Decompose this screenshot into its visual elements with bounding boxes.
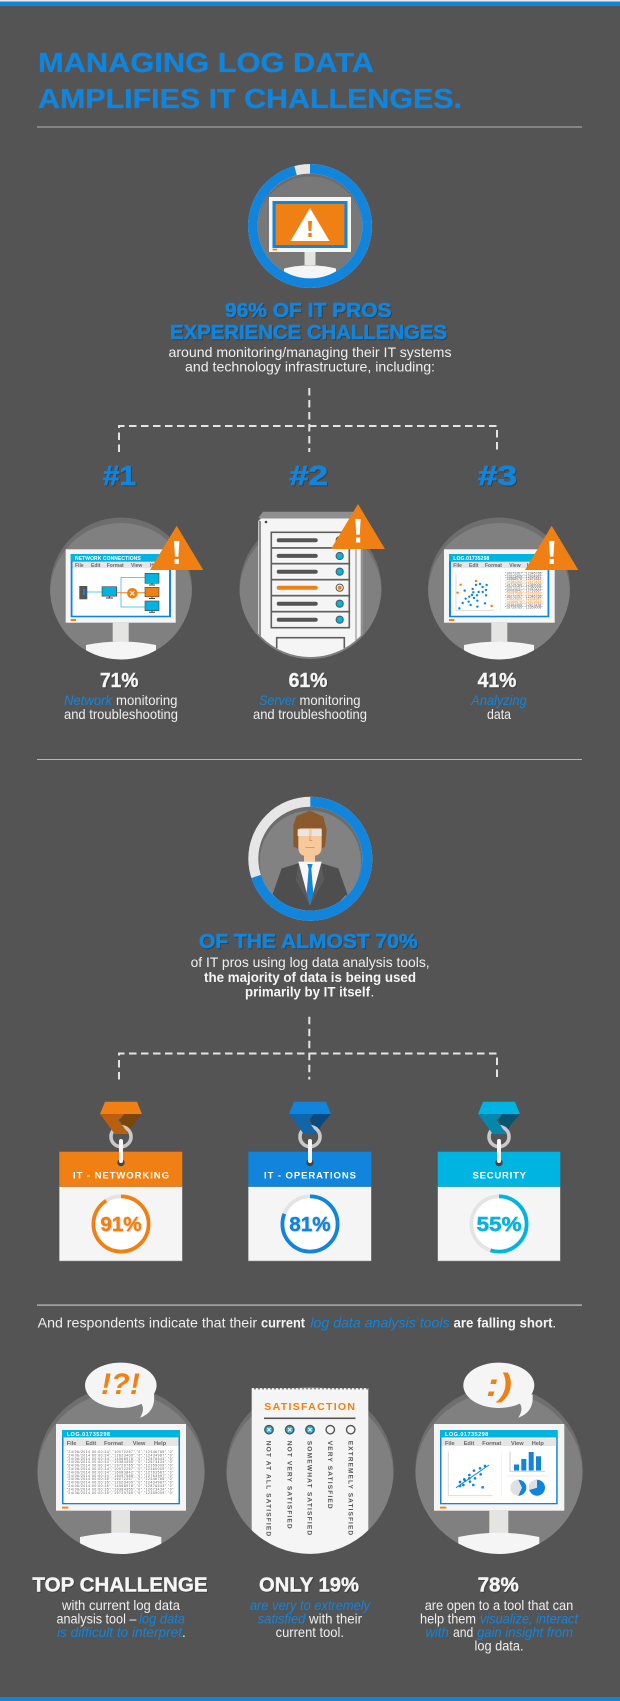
stat: 78%: 78% [478,1574,519,1596]
icon: log monitor with speech bubble: Edit [86,1441,96,1447]
stat: top challenge: TOP CHALLENGE [32,1574,208,1596]
log data rows: "19729765","12359009" [505,606,544,610]
log data rows: "14568978","12876543" [505,577,544,581]
scatter plot [448,1452,502,1496]
log data rows: "24/06/2014 00:00:35","19384355","0","12673434","0" [67,1487,174,1491]
text: around monitoring: and technology infrastructure, including: [185,360,435,374]
icon: charts monitor with speech bubble: Edit [464,1441,474,1447]
rating labels: VERY SATISFIED [326,1441,333,1509]
stat: 78%: are open to a tool that can [425,1598,573,1613]
stat: 61% server [253,670,367,722]
stat: 61% server: 61% [289,670,328,692]
icon: log monitor with speech bubble [37,1363,205,1560]
heading: of the almost 70%: OF THE ALMOST 70% [199,931,418,953]
title [38,47,462,114]
title: MANAGING LOG DATA [38,47,374,78]
log data rows: "24/06/2014 00:00:34","16083842","0","12763567","0" [67,1470,174,1474]
stat: 78%: visualize, interact [480,1612,579,1626]
log data rows: "16083842","12763567" [505,589,544,593]
text: respondents falling short: are falling short [454,1315,553,1330]
stat: 78%: and [453,1625,473,1640]
log data rows: "15097588","12763997" [505,591,544,595]
heading: 96% of IT pros: 96% OF IT PROS [225,300,392,322]
stat: 41% analyzing: Analyzing [470,693,527,708]
icon: log monitor with speech bubble: View [133,1441,146,1447]
icon: charts monitor with speech bubble: Help [532,1441,544,1447]
stat: top challenge: analysis tool – [56,1612,137,1626]
stat: 71% network: 71% [100,670,139,692]
icon: analyzing monitor: Format [485,563,502,569]
stat: 41% analyzing: 41% [478,670,517,692]
log data rows: "10072257","12346765" [505,572,544,576]
donut: 91% [93,1196,149,1252]
text: respondents falling short: . [552,1315,556,1330]
stat: 78%: gain insight from [477,1625,573,1640]
log data rows [67,1450,174,1495]
badge: security 55% [438,1102,560,1261]
donut: 81%: 81% [289,1214,331,1236]
log data rows [505,572,544,610]
text: majority of data: of IT pros using log data analysis tools, [191,955,430,970]
donut: 55%: 55% [476,1214,522,1236]
icon: network monitor: View [131,563,142,569]
stat: 71% network: Network [64,693,113,708]
icon: IT pro portrait in 70% ring [253,802,367,923]
text: respondents falling short: current [261,1315,305,1330]
face [298,828,322,865]
icon: warning triangle [525,526,578,570]
stat: 78% [420,1574,579,1654]
speech bubble [85,1363,157,1418]
text: around monitoring [168,345,452,374]
heading: 96% of IT pros [170,300,447,344]
icon: analyzing monitor [428,518,578,670]
suit [272,863,348,911]
lanyard [478,1102,520,1166]
bar chart [510,1452,545,1471]
icon: charts monitor with speech bubble [415,1363,583,1560]
stat: only 19% [250,1574,371,1640]
stat: 71% network: monitoring [116,693,178,708]
rating circles [265,1426,355,1434]
log data rows: "19384355","12673434" [505,603,544,607]
text: respondents falling short: log data analysis tools [310,1315,450,1330]
text: respondents falling short [38,1315,556,1330]
pie charts [510,1480,545,1496]
log data rows: "14568978","12876543" [505,600,544,604]
speech bubble: :) [486,1367,512,1403]
log data rows: "24/06/2014 00:00:34","14568978","0","12876543","0" [67,1457,174,1461]
icon: analyzing monitor: View [509,563,521,569]
icon: charts monitor with speech bubble: File [445,1441,455,1447]
icon: warning triangle [331,504,385,549]
icon: charts monitor with speech bubble: View [511,1441,524,1447]
stat: top challenge [32,1574,208,1640]
icon: log monitor with speech bubble: Help [154,1441,167,1447]
log data rows: "24/06/2014 00:00:35","14568978","0","12876543","0" [67,1484,174,1488]
rating labels: SOMEWHAT SATISFIED [306,1441,313,1535]
stat: 41% analyzing [470,670,527,722]
stat: top challenge: . [182,1625,186,1640]
text: around monitoring: around monitoring/managing their IT systems [168,345,452,360]
heading: 96% of IT pros: EXPERIENCE CHALLENGES [170,322,447,344]
stat: 41% analyzing: data [487,707,511,722]
icon: analyzing monitor: File [453,563,462,569]
stat: only 19%: satisfied [258,1612,306,1626]
icon: charts monitor with speech bubble: LOG.01735298 [445,1432,488,1438]
log data rows: "24/06/2014 00:00:35","16072257","0","12346765","0" [67,1477,174,1481]
icon: satisfaction receipt [226,1387,394,1570]
rank numbers: #1 [103,460,136,491]
stat: 61% server: and troubleshooting [253,707,367,722]
title: AMPLIFIES IT CHALLENGES. [38,83,462,114]
hair back [293,811,327,850]
rating labels [265,1441,353,1536]
log data rows: "24/06/2014 00:00:35","12623409","0","12434987","0" [67,1481,174,1485]
arrow: dashed connector top [119,388,497,452]
log data rows: "12623409","12434987" [505,574,544,578]
text: majority of data: . [370,984,374,1000]
icon: network monitor: File [75,563,84,569]
text: majority of data [191,955,430,1000]
icon: network monitor: Help [150,563,161,569]
log data rows: "16072257","12346765" [505,594,544,598]
icon: server [240,504,385,659]
log data rows: "12623409","12434987" [505,597,544,601]
icon: network monitor: Edit [91,563,101,569]
icon: network monitor [50,518,203,670]
stat: 78%: log data. [474,1638,524,1654]
icon: log monitor with speech bubble: Format [104,1441,123,1447]
badge: IT networking 91%: IT - NETWORKING [73,1171,169,1182]
icon: warning triangle [150,526,203,570]
rank numbers: #3 [478,460,517,491]
text: respondents falling short: And respondents indicate that their [38,1315,258,1330]
stat: top challenge: with current log data [61,1598,180,1613]
rating labels: EXTREMELY SATISFIED [346,1441,353,1535]
lanyard [289,1102,331,1166]
stat: 78%: with [426,1625,449,1640]
badge: IT operations 81% [248,1102,371,1261]
icon: charts monitor with speech bubble: Format [482,1441,501,1447]
stat: only 19%: ONLY 19% [259,1574,359,1596]
log data rows: "24/06/2014 00:00:34","10072257","0","12360009","0" [67,1467,174,1471]
rating labels: NOT AT ALL SATISFIED [265,1441,272,1536]
stat: 71% network [64,670,178,722]
speech bubble [463,1363,534,1418]
log data rows: "24/06/2014 00:00:34","19384355","0","12673434","0" [67,1460,174,1464]
icon: monitor with warning in 96% ring [253,169,367,285]
log data rows: "24/06/2014 00:00:34","19729765","0","12359009","0" [67,1464,174,1468]
rank numbers: #2 [289,460,328,491]
stat: 78%: help them [420,1612,476,1626]
donut: 55% [471,1196,527,1252]
rating labels: NOT VERY SATISFIED [285,1441,292,1529]
stat: only 19%: are very to extremely [250,1598,371,1613]
stat: 61% server: monitoring [300,693,360,708]
icon: log monitor with speech bubble: File [67,1441,76,1447]
scatter plot [456,573,500,612]
donut: 91%: 91% [100,1214,142,1236]
icon: satisfaction receipt: SATISFACTION [264,1401,355,1413]
badge: security 55%: SECURITY [472,1171,527,1182]
stat: 71% network: and troubleshooting [64,707,178,722]
lanyard [100,1102,142,1166]
icon: network monitor: Format [107,563,124,569]
donut: 81% [282,1196,338,1252]
log data rows: "24/06/2014 00:00:34","12623409","0","12434987","0" [67,1453,174,1457]
text: majority of data: primarily by IT itself [245,984,370,1000]
icon: log monitor with speech bubble: LOG.01735298 [67,1432,110,1438]
stat: only 19%: with their [308,1612,362,1626]
log data rows: "24/06/2014 00:00:34","10072257","0","12346765","0" [67,1450,174,1454]
icon: analyzing monitor: Edit [469,563,479,569]
log data rows: "19729765","12359009" [505,583,544,587]
text: majority of data: the majority of data is being used [204,970,416,985]
arrow: dashed connector middle [119,1017,497,1080]
stat: top challenge: is difficult to interpret [57,1625,183,1640]
badge: IT networking 91% [59,1102,182,1261]
log data rows: "19384355","12673434" [505,580,544,584]
stat: 61% server: Server [259,693,296,708]
speech bubble: !?! [101,1368,140,1401]
stat: only 19%: current tool. [276,1625,344,1640]
stat: top challenge: log data [139,1612,185,1626]
network diagram [79,573,159,612]
icon: network monitor: NETWORK CONNECTIONS [75,556,141,562]
log data rows: "24/06/2014 00:00:35","19729765","0","12359009","0" [67,1491,174,1495]
rank numbers [103,460,517,491]
icon: analyzing monitor: Help [527,563,538,569]
icon: analyzing monitor: LOG.01735298 [453,556,490,562]
badge: IT operations 81%: IT - OPERATIONS [264,1171,356,1182]
log data rows: "24/06/2014 00:00:34","15097588","0","12763997","0" [67,1474,174,1478]
log data rows: "10072257","12360009" [505,586,544,590]
